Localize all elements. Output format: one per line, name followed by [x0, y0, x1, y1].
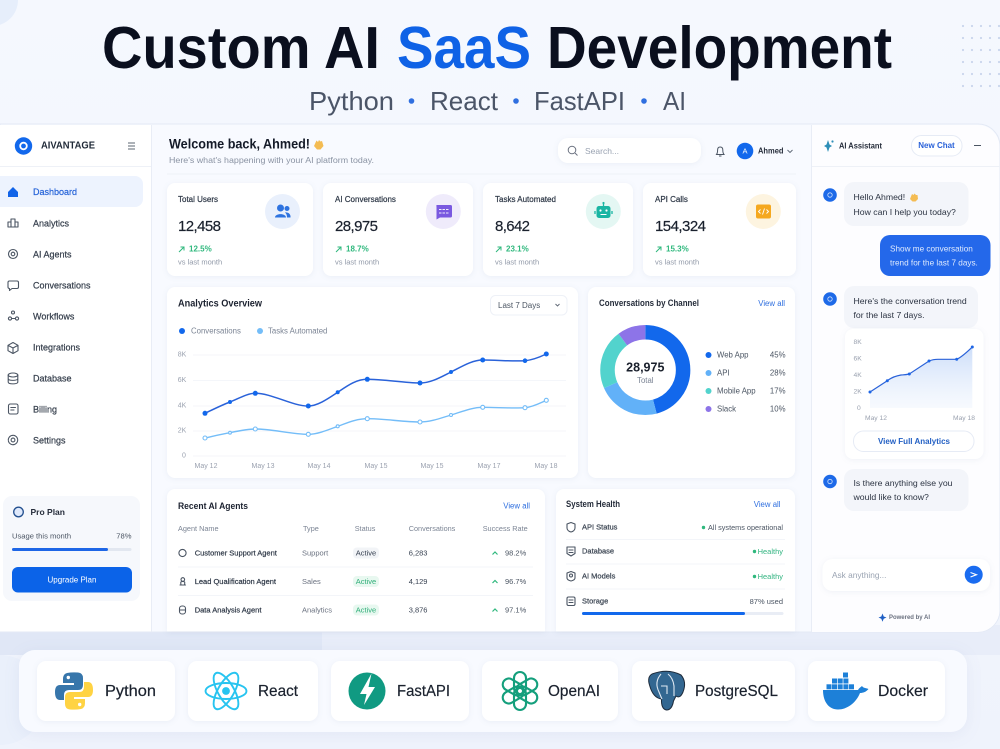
panel: system health: System Health [566, 499, 620, 509]
panel: system health [556, 489, 795, 632]
row: database [567, 546, 783, 556]
chat chart card: May 12 [865, 415, 887, 422]
table header: Type [303, 524, 319, 533]
panel: tech stack [19, 650, 967, 732]
stat card: api calls: vs last month [655, 258, 699, 266]
donut chart [608, 332, 683, 408]
header: welcome: Welcome back, Ahmed! [169, 136, 310, 152]
row: api status [567, 522, 783, 532]
powered by ai: Powered by AI [889, 614, 930, 621]
tech card: openai [482, 661, 618, 721]
nav item: ai agents: AI Agents [33, 250, 72, 260]
chat chart card: 8K [854, 339, 862, 346]
bot message: greeting: How can I help you today? [854, 207, 956, 217]
dropdown: last 7 days [490, 296, 567, 315]
panel: pro plan [3, 496, 140, 601]
search box: Search... [585, 146, 619, 156]
row: customer support agent: Active [356, 548, 376, 558]
row: data analysis agent [180, 604, 527, 616]
donut legend: Mobile App [717, 386, 756, 396]
tech card: python [37, 661, 175, 721]
stat card: api calls: 15.3% [666, 244, 689, 254]
header: welcome: Here's what's happening with your AI platform today. [169, 155, 374, 165]
row: data analysis agent: 3,876 [409, 606, 427, 614]
line chart: 6K [178, 377, 187, 384]
panel: pro plan: 78% [116, 532, 132, 540]
donut legend: Slack [717, 404, 736, 414]
tech card: fastapi: FastAPI [397, 683, 450, 700]
row: data analysis agent: 97.1% [505, 606, 527, 614]
donut legend: API [717, 368, 730, 378]
row: storage: 87% used [750, 597, 783, 606]
logo [15, 137, 95, 155]
line chart: May 14 [308, 463, 331, 470]
button: upgrade plan: Upgrade Plan [48, 576, 96, 584]
subtitle: Python [309, 86, 394, 116]
user menu: A [742, 146, 748, 156]
nav item: integrations [8, 342, 81, 354]
line chart: 0 [182, 452, 186, 460]
nav item: dashboard [0, 176, 143, 207]
panel: ai assistant [812, 125, 1000, 632]
donut legend: 17% [770, 386, 786, 396]
row: customer support agent: Support [302, 548, 329, 558]
line chart: May 13 [252, 463, 275, 470]
subtitle: FastAPI [534, 86, 625, 116]
nav item: dashboard: Dashboard [33, 187, 77, 197]
table header: Agent Name [178, 524, 219, 533]
nav item: billing: Billing [33, 404, 57, 414]
header: welcome [169, 136, 374, 165]
stat card: ai conversations: 18.7% [346, 244, 369, 254]
donut legend [706, 350, 786, 414]
donut chart: 28,975 [626, 360, 664, 374]
nav item: analytics: Analytics [33, 218, 70, 228]
chat chart card: 4K [854, 372, 862, 379]
stat card: ai conversations: vs last month [335, 258, 379, 266]
bot message: greeting [823, 182, 968, 226]
donut chart: Total [637, 376, 654, 385]
stat card: api calls [643, 183, 796, 276]
tech card: react: React [258, 683, 299, 700]
chat input: Ask anything... [832, 570, 886, 580]
row: ai models [567, 572, 783, 581]
icon: react [206, 669, 246, 713]
row: database: Healthy [758, 547, 783, 556]
row: customer support agent [179, 548, 527, 558]
line chart: May 17 [478, 463, 501, 470]
row: data analysis agent: Analytics [302, 606, 332, 614]
row: customer support agent: Customer Support Agent [195, 548, 278, 558]
row: lead qualification agent: Lead Qualification Agent [195, 577, 277, 586]
chart legend: Conversations [191, 326, 241, 336]
title: SaaS [397, 15, 531, 81]
subtitle: AI [663, 86, 686, 116]
stat card: api calls: API Calls [655, 195, 688, 204]
line chart: 8K [178, 352, 187, 358]
chat chart card: 0 [857, 405, 861, 412]
bot message: follow-up [823, 469, 968, 511]
bot message: trend: Here's the conversation trend [854, 296, 967, 306]
nav item: integrations: Integrations [33, 342, 81, 352]
row: lead qualification agent: 4,129 [409, 577, 427, 586]
button: view full analytics: View Full Analytics [878, 437, 951, 446]
panel: pro plan: Pro Plan [30, 507, 65, 517]
user menu: Ahmed [758, 146, 784, 156]
line chart: 4K [178, 402, 187, 410]
tech card: python: Python [105, 683, 156, 700]
panel: sidebar [0, 125, 152, 632]
chat chart card: 2K [854, 388, 862, 396]
bot message: greeting: Hello Ahmed! [854, 192, 905, 202]
table header: Conversations [409, 524, 456, 533]
row: database: Database [582, 546, 614, 556]
search box [558, 138, 701, 163]
panel: recent ai agents: View all [503, 502, 530, 510]
row: ai models: Healthy [758, 572, 783, 581]
nav item: conversations: Conversations [33, 280, 91, 290]
line chart: May 12 [195, 463, 218, 470]
row: storage: Storage [582, 596, 608, 606]
row: data analysis agent: Data Analysis Agent [195, 606, 262, 614]
title: Custom AI [102, 15, 380, 81]
row: customer support agent: 6,283 [409, 548, 427, 558]
row: api status: API Status [582, 522, 618, 532]
icon: fastapi [348, 672, 386, 710]
stat card: ai conversations: 28,975 [335, 218, 378, 235]
panel: pro plan: Usage this month [12, 532, 71, 540]
panel: conversations by channel: Conversations by Channel [599, 298, 699, 308]
panel: recent ai agents [167, 489, 545, 632]
row: customer support agent: 98.2% [505, 548, 527, 558]
nav item: workflows: Workflows [33, 312, 75, 322]
chat header: AI Assistant [839, 140, 882, 150]
panel: system health: View all [754, 500, 781, 509]
chat chart card [845, 329, 984, 459]
nav item: settings: Settings [33, 436, 66, 446]
tech card: fastapi [331, 661, 469, 721]
panel: analytics overview [167, 287, 578, 478]
table header: Success Rate [483, 524, 528, 533]
user message: Show me conversation [890, 244, 973, 254]
subtitle [309, 86, 686, 116]
powered by ai [878, 614, 930, 622]
stat card: total users [167, 183, 313, 276]
stat card: tasks automated: Tasks Automated [495, 195, 556, 204]
stat card: total users: 12.5% [189, 244, 212, 254]
nav item: billing [8, 404, 57, 414]
stat card: tasks automated: 23.1% [506, 244, 529, 254]
panel: recent ai agents: Recent AI Agents [178, 501, 248, 511]
donut legend: 45% [770, 350, 786, 360]
row: lead qualification agent [180, 576, 527, 587]
row: ai models: AI Models [582, 572, 616, 580]
title: Development [547, 15, 892, 81]
nav item: database [8, 373, 72, 384]
subtitle: React [430, 86, 499, 116]
nav item: settings [8, 435, 66, 446]
chat chart card: 6K [854, 356, 862, 362]
line chart: May 18 [535, 463, 558, 470]
nav item: database: Database [33, 374, 72, 384]
dropdown: last 7 days: Last 7 Days [498, 301, 540, 310]
icon: docker [823, 672, 868, 710]
line chart: 2K [178, 428, 187, 434]
stat card: total users: vs last month [178, 258, 222, 266]
icon: bell [716, 147, 724, 156]
bot message: follow-up: would like to know? [852, 492, 929, 502]
stat card: total users: 12,458 [178, 218, 221, 235]
icon: postgresql [649, 671, 685, 710]
user message [880, 235, 990, 276]
row: lead qualification agent: Active [356, 577, 376, 586]
nav item: analytics [8, 218, 70, 228]
decorative dot grid [962, 25, 1000, 87]
logo: AIVANTAGE [41, 140, 95, 152]
tech card: docker: Docker [878, 683, 929, 700]
icon: menu [128, 143, 135, 149]
stat card: ai conversations [323, 183, 473, 276]
stat card: tasks automated: vs last month [495, 258, 539, 266]
chart legend: Tasks Automated [268, 326, 327, 336]
tech card: postgresql: PostgreSQL [695, 683, 778, 700]
nav item: ai agents [8, 250, 72, 260]
stat card: tasks automated: 8,642 [495, 218, 530, 235]
row: data analysis agent: Active [356, 606, 376, 614]
row: lead qualification agent: Sales [302, 577, 321, 586]
chat header: New Chat [918, 141, 955, 150]
row: api status: All systems operational [708, 523, 783, 532]
panel: analytics overview: Analytics Overview [178, 298, 262, 310]
table header [178, 524, 528, 533]
panel: conversations by channel: View all [758, 299, 785, 308]
user menu [737, 143, 792, 159]
donut legend: 28% [770, 368, 786, 378]
chat header [824, 136, 981, 156]
panel: conversations by channel [588, 287, 795, 478]
user message: trend for the last 7 days. [890, 258, 978, 268]
stat card: total users: Total Users [178, 195, 218, 204]
line chart: May 15 [421, 463, 444, 470]
chart legend [179, 326, 327, 336]
table header: Status [355, 524, 376, 533]
donut legend: 10% [770, 404, 786, 414]
stat card: ai conversations: AI Conversations [335, 195, 396, 204]
donut legend: Web App [717, 350, 749, 360]
tech card: docker [808, 661, 945, 721]
bot message: follow-up: Is there anything else you [854, 478, 953, 488]
row: storage [567, 596, 784, 615]
nav item: workflows [8, 311, 75, 322]
icon: python [55, 672, 93, 710]
tech card: react [188, 661, 318, 721]
bot message: trend: for the last 7 days. [854, 310, 924, 320]
nav item: conversations [8, 280, 91, 290]
icon: openai [501, 672, 539, 710]
chat chart card: May 18 [953, 415, 975, 422]
title [102, 15, 892, 81]
stat card: api calls: 154,324 [655, 218, 706, 235]
tech card: postgresql [632, 661, 795, 721]
tech card: openai: OpenAI [548, 683, 600, 700]
bot message: trend [823, 286, 978, 328]
line chart: May 15 [365, 463, 388, 470]
dashboard window [0, 124, 1000, 632]
stat card: tasks automated [483, 183, 633, 276]
row: lead qualification agent: 96.7% [505, 577, 527, 586]
line chart [178, 352, 566, 470]
chat input [822, 559, 990, 591]
